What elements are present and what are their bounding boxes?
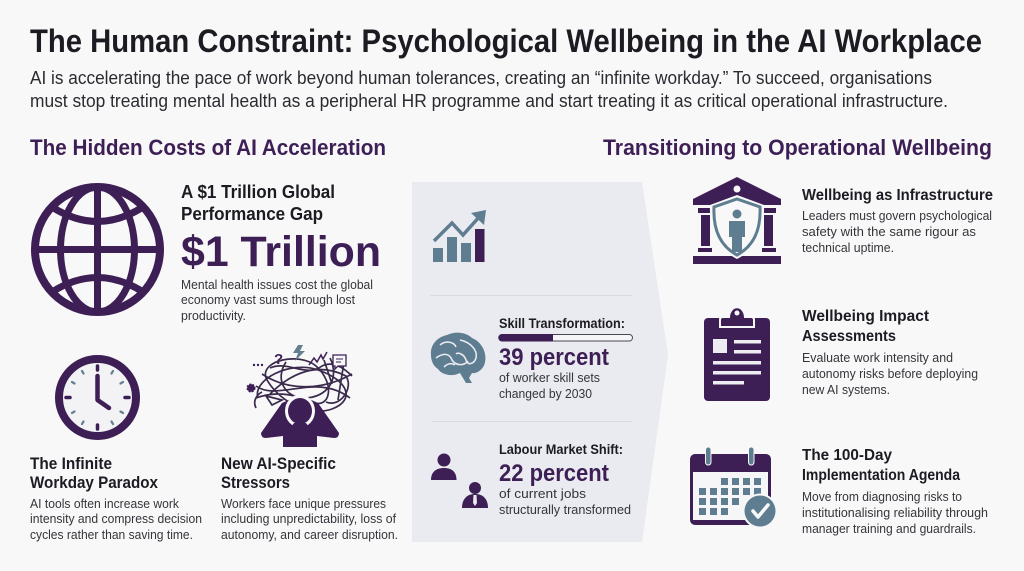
panel: 100-day implementation agenda: institutionalising reliability through xyxy=(802,505,988,520)
icon: calendar with check xyxy=(690,447,778,528)
panel: infinite workday paradox: Workday Paradox xyxy=(30,473,158,492)
stat: skill transformation: Skill Transformation: xyxy=(499,315,625,331)
panel: 100-day implementation agenda: Implementation Agenda xyxy=(802,467,960,484)
panel: performance gap text xyxy=(181,182,381,323)
panel: 100-day implementation agenda: manager training and guardrails. xyxy=(802,521,976,536)
panel: wellbeing as infrastructure: Wellbeing as Infrastructure xyxy=(802,187,993,204)
icon: globe xyxy=(35,187,160,312)
panel: central arrow xyxy=(412,182,668,542)
panel: wellbeing as infrastructure xyxy=(802,187,993,255)
stat: skill transformation: of worker skill sets xyxy=(499,370,600,385)
panel: wellbeing impact assessments xyxy=(802,308,978,397)
panel: infinite workday paradox: intensity and compress decision xyxy=(30,511,202,526)
panel: wellbeing as infrastructure: Leaders must govern psychological xyxy=(802,208,992,223)
panel: AI-specific stressors xyxy=(221,454,398,542)
stat: labour market shift: structurally transformed xyxy=(499,502,631,517)
panel: 100-day implementation agenda xyxy=(802,447,988,536)
panel: wellbeing impact assessments: Evaluate work intensity and xyxy=(802,350,953,365)
panel: infinite workday paradox: AI tools often increase work xyxy=(30,496,179,511)
stat: skill transformation: changed by 2030 xyxy=(499,386,592,401)
icon: two workers xyxy=(431,454,488,508)
stat: skill transformation: 39 percent xyxy=(499,344,609,371)
panel: infinite workday paradox: The Infinite xyxy=(30,454,112,473)
icon: brain xyxy=(431,333,485,383)
icon: stressed person with scribbles xyxy=(247,345,352,447)
panel: wellbeing as infrastructure: technical uptime. xyxy=(802,240,894,255)
stat: labour market shift: of current jobs xyxy=(499,486,587,501)
icon: clock xyxy=(59,359,136,436)
panel: wellbeing impact assessments: new AI systems. xyxy=(802,382,890,397)
progress bar 39 percent xyxy=(498,334,632,342)
panel: 100-day implementation agenda: The 100-Day xyxy=(802,447,892,464)
stat: skill transformation xyxy=(498,315,632,401)
panel: wellbeing impact assessments: Wellbeing Impact xyxy=(802,308,929,325)
panel: AI-specific stressors: Stressors xyxy=(221,473,290,492)
panel: wellbeing as infrastructure: safety with the same rigour as xyxy=(802,224,976,239)
heading: hidden costs: The Hidden Costs of AI Acceleration xyxy=(30,135,386,160)
divider xyxy=(430,296,632,422)
panel: performance gap text: productivity. xyxy=(181,308,246,323)
panel: performance gap text: Mental health issues cost the global xyxy=(181,277,373,292)
panel: infinite workday paradox: cycles rather than saving time. xyxy=(30,527,193,542)
panel: AI-specific stressors: New AI-Specific xyxy=(221,454,336,473)
panel: performance gap text: economy vast sums through lost xyxy=(181,292,355,307)
icon: growth chart xyxy=(433,210,486,262)
icon: clipboard xyxy=(704,307,770,401)
heading: operational wellbeing: Transitioning to Operational Wellbeing xyxy=(603,135,992,160)
panel: AI-specific stressors: Workers face unique pressures xyxy=(221,496,386,511)
icon: institution with shield xyxy=(693,177,781,264)
stat: labour market shift: Labour Market Shift: xyxy=(499,441,623,457)
panel: infinite workday paradox xyxy=(30,454,202,542)
panel: 100-day implementation agenda: Move from diagnosing risks to xyxy=(802,489,962,504)
intro text: AI is accelerating the pace of work beyond human tolerances, creating an “infinite workday.” To succeed, organisations xyxy=(30,68,932,88)
intro text: must stop treating mental health as a peripheral HR programme and start treating it as critical operational infrastructure. xyxy=(30,91,948,111)
panel: AI-specific stressors: including unpredictability, loss of xyxy=(221,511,396,526)
stat: labour market shift xyxy=(499,441,631,517)
panel: AI-specific stressors: autonomy, and career disruption. xyxy=(221,527,398,542)
panel: performance gap text: Performance Gap xyxy=(181,204,323,224)
intro text xyxy=(30,68,948,111)
icon: stressed person with scribbles: ? xyxy=(274,351,283,368)
panel: wellbeing impact assessments: Assessments xyxy=(802,328,896,345)
stat: labour market shift: 22 percent xyxy=(499,460,609,487)
panel: performance gap text: A $1 Trillion Global xyxy=(181,182,335,202)
panel: performance gap text: $1 Trillion xyxy=(181,228,381,276)
panel: wellbeing impact assessments: autonomy risks before deploying xyxy=(802,366,978,381)
